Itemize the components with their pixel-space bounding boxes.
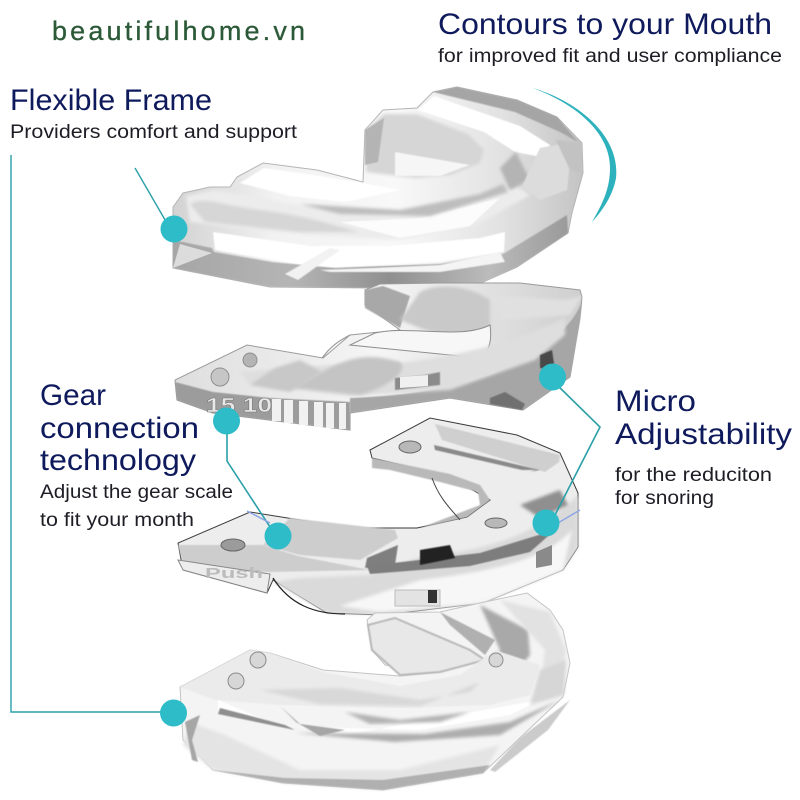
callout line: flexible frame	[135, 168, 168, 225]
lower gear plate	[178, 418, 578, 615]
subtext: reduction for snoring	[615, 465, 772, 509]
white top bands	[418, 96, 550, 158]
marker dots	[160, 216, 566, 726]
heading: gear connection technology	[40, 379, 233, 531]
occlusal surface	[180, 650, 540, 708]
callout line: micro adjustability	[555, 383, 600, 515]
heading: micro adjustability: Adjustability	[615, 418, 792, 451]
subtext: reduction for snoring: for snoring	[615, 488, 714, 509]
bottom tray	[180, 593, 570, 790]
subtext: improved fit: for improved fit and user compliance	[438, 46, 782, 67]
upper gear plate with scale: 15 10	[206, 395, 272, 417]
lower gear plate: Push	[205, 565, 263, 582]
watermark: beautifulhome.vn: beautifulhome.vn	[52, 16, 305, 46]
accent line: micro blue	[558, 510, 580, 523]
lower bowl	[183, 722, 500, 790]
callout line: bottom tray bracket	[11, 155, 162, 712]
subtext: adjust the gear scale: Adjust the gear scale	[40, 482, 233, 503]
heading: flexible frame: Flexible Frame	[10, 84, 212, 117]
subtext: comfort and support: Providers comfort and support	[10, 122, 298, 143]
callout line: gear connection	[227, 425, 272, 530]
window slots	[395, 372, 440, 390]
top tray: flexible frame	[173, 87, 583, 288]
heading: flexible frame	[10, 84, 298, 143]
heading: micro adjustability: Micro	[615, 385, 696, 418]
back inner wall	[365, 286, 410, 328]
front curved rim	[273, 495, 578, 615]
heading: micro adjustability	[615, 385, 792, 509]
accent line: gear blue	[247, 511, 270, 523]
plate rim	[350, 300, 582, 413]
heading: gear connection technology: Gear	[40, 379, 106, 412]
inner back wall	[368, 618, 485, 675]
inner side thickness	[372, 458, 490, 528]
crescent arc	[533, 88, 616, 222]
heading: contours to your mouth	[438, 8, 782, 67]
lower white band	[213, 232, 505, 268]
inner arch opening	[366, 114, 484, 178]
front scale ruler	[175, 382, 350, 430]
heading: gear connection technology: connection	[40, 412, 199, 445]
lower grey rim	[173, 215, 568, 288]
subtext: adjust the gear scale: to fit your month	[40, 510, 194, 531]
subtext: adjust the gear scale	[40, 482, 233, 531]
pegs	[228, 652, 503, 689]
subtext: reduction for snoring: for the reduciton	[615, 465, 772, 486]
upper gear plate with scale	[175, 283, 582, 430]
heading: contours to your mouth: Contours to your Mouth	[438, 8, 772, 41]
heading: gear connection technology: technology	[40, 444, 196, 477]
